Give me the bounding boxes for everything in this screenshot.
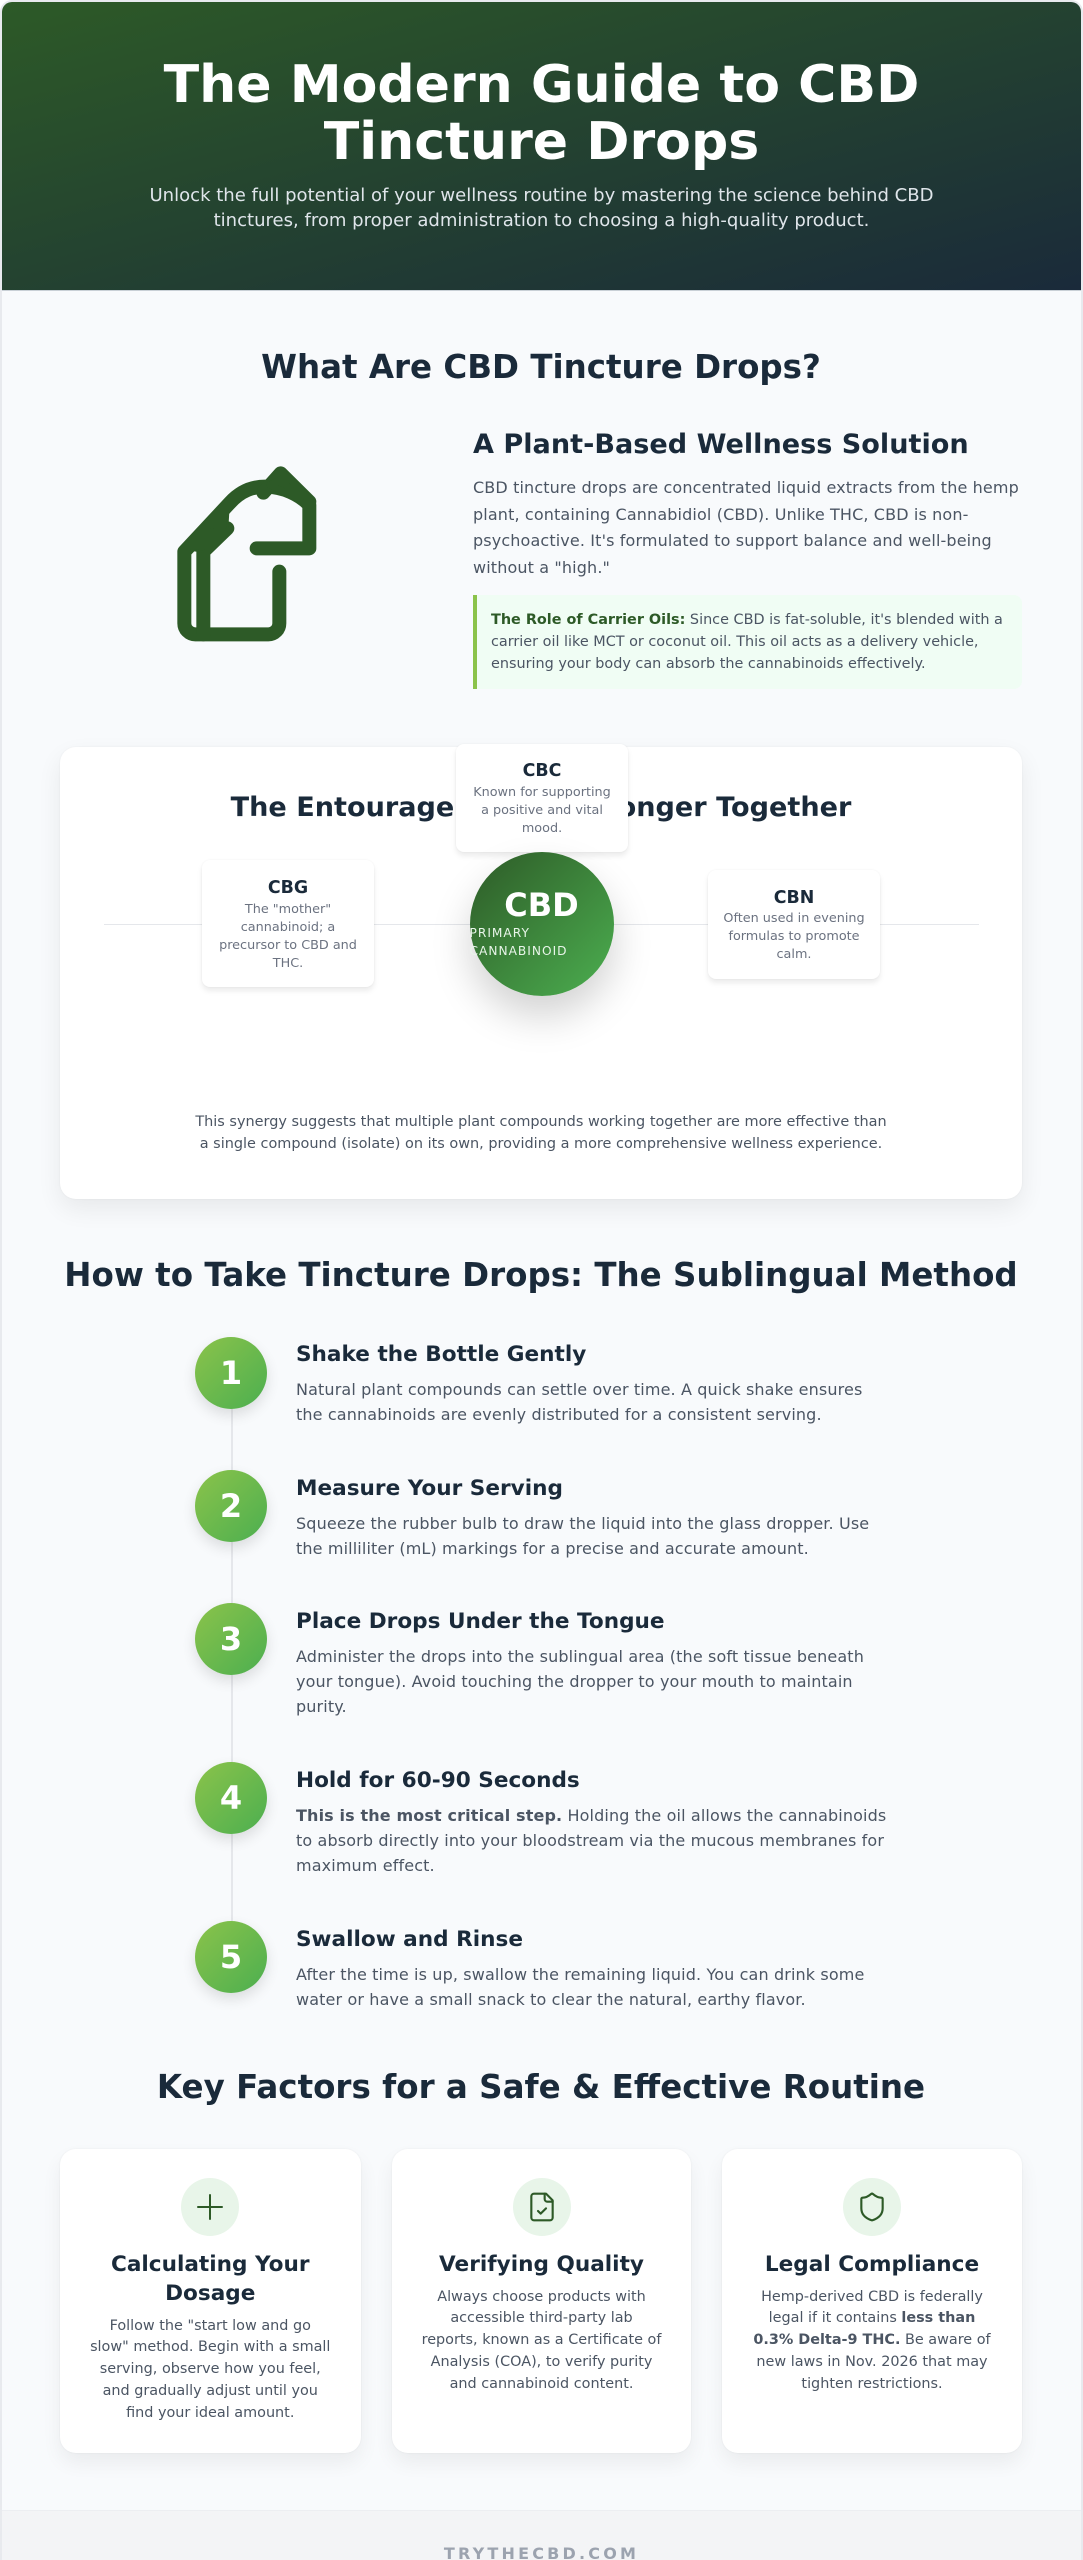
CBC description: Known for supporting xyxy=(473,784,611,800)
connector line xyxy=(104,924,979,925)
card title xyxy=(111,2252,310,2306)
title xyxy=(164,55,919,172)
CBG description xyxy=(219,902,357,971)
header banner xyxy=(0,0,1083,291)
card text xyxy=(753,2288,991,2392)
card title: Calculating Your xyxy=(111,2252,310,2276)
subtitle: tinctures, from proper administration to choosing a high-quality product. xyxy=(214,210,869,231)
subtitle xyxy=(149,185,934,231)
step number xyxy=(195,1603,267,1675)
subtitle: Unlock the full potential of your wellness routine by mastering the science behind CBD xyxy=(149,185,934,206)
primary cannabinoid label xyxy=(470,926,568,958)
step 4 xyxy=(192,1762,886,1875)
panel: entourage effect xyxy=(60,747,1022,1199)
step 5 xyxy=(192,1921,864,2009)
card text: slow" method. Begin with a small xyxy=(90,2339,330,2355)
CBN name: CBN xyxy=(774,888,814,908)
description paragraph: plant, containing Cannabidiol (CBD). Unlike THC, CBD is non- xyxy=(473,505,969,524)
card: verifying quality xyxy=(392,2149,691,2453)
description paragraph: without a "high." xyxy=(473,558,610,577)
card text: Hemp-derived CBD is federally xyxy=(761,2288,983,2304)
step title: Measure Your Serving xyxy=(296,1476,563,1501)
section heading: What Are CBD Tincture Drops? xyxy=(261,348,821,386)
callout text: The Role of Carrier Oils: Since CBD is fat-soluble, it's blended with a xyxy=(491,612,1003,628)
step text: the cannabinoids are evenly distributed for a consistent serving. xyxy=(296,1405,822,1424)
card: legal compliance xyxy=(722,2149,1022,2453)
step text: Natural plant compounds can settle over time. A quick shake ensures xyxy=(296,1380,862,1399)
CBN description: Often used in evening xyxy=(723,911,865,926)
card text xyxy=(422,2288,662,2392)
card text: tighten restrictions. xyxy=(801,2376,943,2392)
synergy text xyxy=(195,1114,887,1152)
card text: Follow the "start low and go xyxy=(110,2318,311,2334)
card text: and cannabinoid content. xyxy=(450,2376,633,2392)
step text: the milliliter (mL) markings for a precise and accurate amount. xyxy=(296,1539,809,1558)
card text: serving, observe how you feel, xyxy=(100,2361,321,2377)
card text: legal if it contains less than xyxy=(769,2310,975,2326)
primary cannabinoid label: PRIMARY xyxy=(470,926,530,940)
step text: water or have a small snack to clear the natural, earthy flavor. xyxy=(296,1990,806,2009)
icon: shield xyxy=(843,2178,901,2236)
card text: Always choose products with xyxy=(437,2288,646,2304)
card: CBN xyxy=(708,870,880,979)
card title: Dosage xyxy=(165,2280,255,2306)
card text xyxy=(90,2318,330,2421)
step title: Swallow and Rinse xyxy=(296,1927,523,1952)
card: calculating your dosage xyxy=(60,2149,360,2453)
card text: new laws in Nov. 2026 that may xyxy=(756,2354,988,2370)
step title: Place Drops Under the Tongue xyxy=(296,1609,665,1634)
card: CBC xyxy=(456,744,628,852)
step text: This is the most critical step. Holding the oil allows the cannabinoids xyxy=(296,1806,886,1825)
CBN description: calm. xyxy=(777,947,811,962)
panel heading: The Entourage Effect: Stronger Together xyxy=(231,792,851,823)
primary cannabinoid label: CANNABINOID xyxy=(470,944,568,958)
step text xyxy=(296,1514,869,1558)
step text xyxy=(296,1380,862,1424)
step text: Administer the drops into the sublingual area (the soft tissue beneath xyxy=(296,1647,864,1666)
central circle: CBD xyxy=(470,852,614,996)
CBC description xyxy=(473,784,611,836)
step text: to absorb directly into your bloodstream via the mucous membranes for xyxy=(296,1831,884,1850)
step text: maximum effect. xyxy=(296,1856,435,1875)
step text xyxy=(296,1806,886,1875)
CBN description: formulas to promote xyxy=(728,929,860,944)
CBG description: The "mother" xyxy=(245,902,331,916)
section: sublingual method xyxy=(64,1256,1018,2009)
card title: Verifying Quality xyxy=(439,2252,644,2276)
CBG name: CBG xyxy=(268,878,308,898)
card text: Analysis (COA), to verify purity xyxy=(431,2354,652,2370)
title: The Modern Guide to CBD xyxy=(164,55,919,115)
icon: tincture dropper bottle xyxy=(177,466,316,642)
callout text xyxy=(491,612,1003,672)
card text: accessible third-party lab xyxy=(450,2310,633,2326)
description paragraph: psychoactive. It's formulated to support balance and well-being xyxy=(473,531,992,550)
step title: Shake the Bottle Gently xyxy=(296,1342,586,1367)
description paragraph xyxy=(473,478,1019,577)
section: what are CBD tincture drops xyxy=(177,348,1019,689)
step number xyxy=(195,1762,267,1834)
step text: purity. xyxy=(296,1697,347,1716)
CBC description: a positive and vital xyxy=(481,803,603,818)
synergy text: a single compound (isolate) on its own, providing a more comprehensive wellness experience. xyxy=(200,1136,882,1152)
synergy text: This synergy suggests that multiple plant compounds working together are more effective than xyxy=(195,1114,887,1130)
CBC name: CBC xyxy=(523,761,561,781)
subheading: A Plant-Based Wellness Solution xyxy=(473,429,969,460)
step title: Hold for 60-90 Seconds xyxy=(296,1768,580,1793)
text block: plant-based wellness solution xyxy=(473,429,1019,689)
step number: 2 xyxy=(220,1487,242,1525)
step number: 3 xyxy=(220,1620,242,1658)
step 2 xyxy=(192,1470,869,1558)
card: CBG xyxy=(202,860,374,987)
card text: and gradually adjust until you xyxy=(103,2383,318,2399)
step number xyxy=(195,1470,267,1542)
card text: 0.3% Delta-9 THC. Be aware of xyxy=(753,2332,991,2348)
CBD label: CBD xyxy=(504,886,579,924)
CBG description: THC. xyxy=(273,956,303,971)
callout text: ensuring your body can absorb the cannabinoids effectively. xyxy=(491,656,926,672)
step text: After the time is up, swallow the remaining liquid. You can drink some xyxy=(296,1965,864,1984)
card title: Legal Compliance xyxy=(765,2252,979,2276)
step number: 5 xyxy=(220,1938,242,1976)
step text xyxy=(296,1965,864,2009)
step number: 1 xyxy=(220,1354,242,1392)
CBN description xyxy=(723,911,865,962)
step number xyxy=(195,1921,267,1993)
timeline line xyxy=(231,1408,233,1963)
icon: file check xyxy=(512,2178,570,2236)
callout text: carrier oil like MCT or coconut oil. This oil acts as a delivery vehicle, xyxy=(491,634,979,650)
CBG description: cannabinoid; a xyxy=(241,920,335,935)
card text: find your ideal amount. xyxy=(126,2405,294,2421)
step 1 xyxy=(192,1337,862,1424)
section heading: How to Take Tincture Drops: The Sublingual Method xyxy=(64,1256,1018,1294)
card text: reports, known as a Certificate of xyxy=(422,2332,661,2348)
description paragraph: CBD tincture drops are concentrated liquid extracts from the hemp xyxy=(473,478,1019,497)
step number xyxy=(195,1337,267,1409)
step text xyxy=(296,1647,864,1716)
CBG description: precursor to CBD and xyxy=(219,938,357,953)
step text: Squeeze the rubber bulb to draw the liquid into the glass dropper. Use xyxy=(296,1514,869,1533)
step text: your tongue). Avoid touching the dropper to your mouth to maintain xyxy=(296,1672,853,1691)
callout: carrier oils xyxy=(473,595,1022,689)
icon: plus xyxy=(181,2178,239,2236)
footer xyxy=(0,2510,1083,2560)
title: Tincture Drops xyxy=(324,112,759,172)
step 3 xyxy=(192,1603,864,1716)
heading: key factors: Key Factors for a Safe & Effective Routine xyxy=(157,2068,925,2106)
CBC description: mood. xyxy=(522,821,562,836)
step number: 4 xyxy=(220,1779,242,1817)
